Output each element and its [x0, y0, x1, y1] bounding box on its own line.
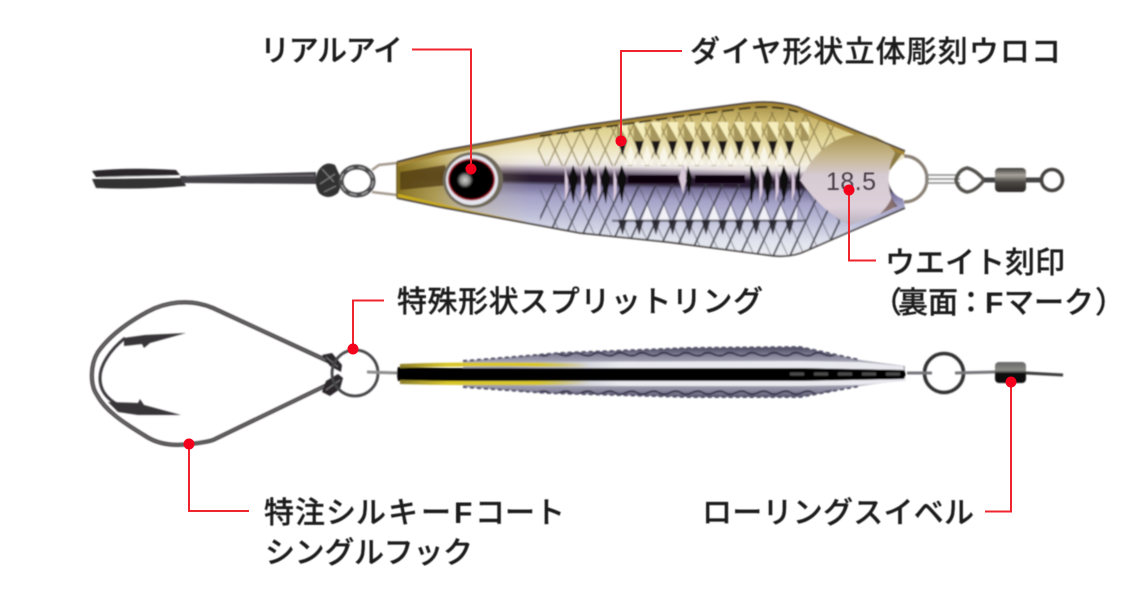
hook knot [322, 353, 342, 372]
label: rolling swivel: ローリングスイベル [702, 497, 974, 530]
pink lozenge [679, 164, 687, 194]
label: single hook: F [454, 497, 472, 530]
upper cream scale row [622, 145, 792, 165]
split ring top view [341, 163, 397, 195]
bottom yellow edge [397, 196, 525, 224]
tail gold area [888, 150, 902, 170]
callout: real eye [260, 35, 476, 174]
jig side view illustration [92, 302, 1063, 445]
lure side body [367, 347, 906, 399]
label: weight stamp: マーク） [1004, 287, 1122, 320]
label: diamond scales: ダイヤ形状立体彫刻ウロコ [690, 36, 1061, 69]
lower barb [108, 399, 181, 415]
upper dark scale row [614, 141, 801, 156]
special split ring [332, 350, 378, 396]
top gold band [397, 104, 905, 164]
real eye [443, 152, 503, 208]
weight stamp number: 18.5 [826, 168, 876, 196]
callout: weight stamp [844, 184, 1122, 320]
dark spike beside lozenge [686, 166, 692, 196]
label: single hook: シングルフック [265, 537, 473, 570]
centre stripe spikes [564, 164, 626, 204]
assist hook side view [92, 163, 341, 197]
rear ring [924, 354, 964, 392]
upper scale cross-hatch [538, 112, 838, 166]
callout: diamond scales [616, 36, 1061, 146]
label: single hook: コート [475, 497, 565, 530]
jig body with scales [397, 100, 905, 260]
lower white highlights [622, 205, 797, 220]
lower dark band and scale row [612, 220, 806, 222]
weight stamp plate [800, 134, 895, 225]
lower scale cross-hatch [540, 184, 840, 260]
scale top dark dashes [540, 107, 798, 136]
callout: rolling swivel [702, 376, 1016, 530]
jig top view illustration [92, 100, 1062, 260]
side hook [92, 302, 343, 445]
upper scale highlights [614, 122, 809, 142]
callout: single hook [184, 438, 565, 570]
body outline [397, 102, 905, 256]
label: weight stamp: F [985, 287, 1003, 320]
nose dark patch [400, 165, 450, 190]
centre stripe dashes [628, 175, 745, 183]
infographic canvas [88, 35, 1106, 566]
label: real eye: リアルアイ [260, 35, 403, 68]
upper barb [124, 333, 186, 348]
label: weight stamp: ウエイト刻印 [885, 247, 1065, 280]
label: single hook: 特注シルキー [264, 497, 451, 530]
rolling swivel top view [925, 168, 1062, 192]
rolling swivel side view [907, 362, 1063, 383]
label: weight stamp: （裏面： [872, 287, 986, 320]
callout: split ring [348, 286, 763, 354]
line eye ring [904, 156, 927, 202]
label: split ring: 特殊形状スプリットリング [397, 286, 763, 319]
